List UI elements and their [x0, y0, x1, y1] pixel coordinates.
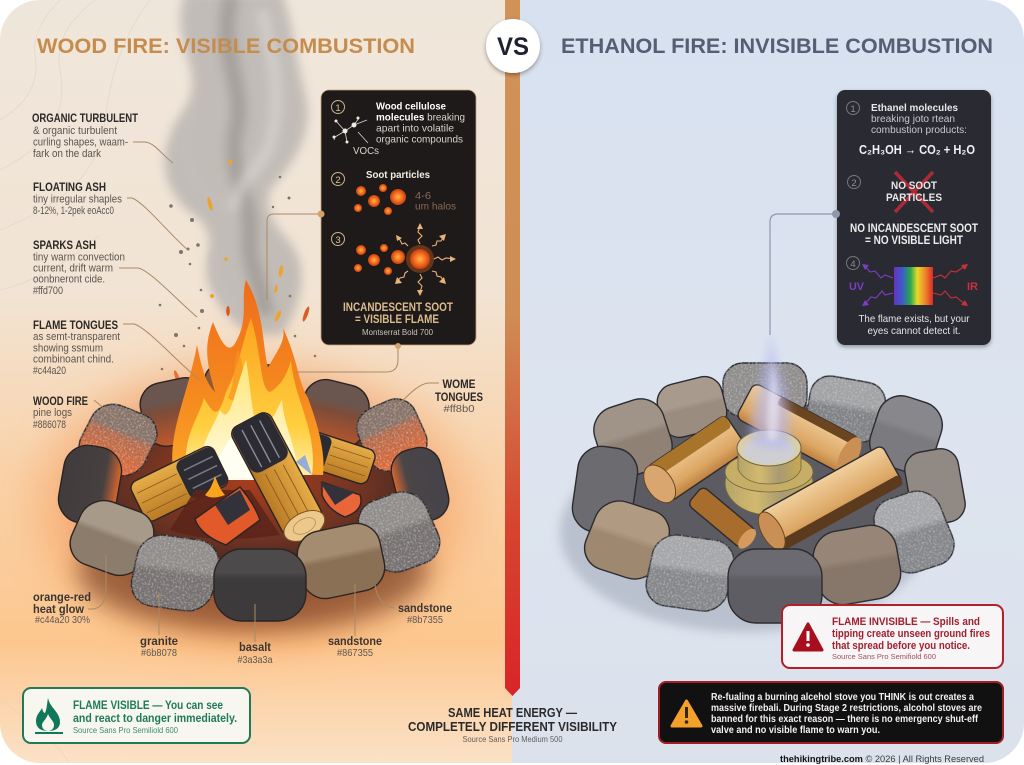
- label: granite: granite: [140, 636, 178, 648]
- label: granite: #6b8078: [141, 648, 177, 659]
- icon: red warning triangle: [794, 624, 822, 650]
- illustration: ash particles: [159, 176, 316, 370]
- illustration: wood fire pit: [7, 280, 497, 670]
- stone: far right: [902, 446, 968, 528]
- callout: refueling warning: valve and no visible flame to warn you.: [711, 725, 880, 736]
- log: center charred log: [229, 410, 330, 548]
- step 2 no soot: PARTICLES: [886, 192, 942, 204]
- label: heat glow: heat glow: [33, 604, 84, 616]
- illustration: smoke column: [165, 0, 308, 335]
- step 3: [332, 223, 456, 296]
- callout: flame visible: Source Sans Pro Semiliold 600: [73, 726, 179, 735]
- step 1: 1: [850, 104, 856, 115]
- label: sandstone right: #8b7355: [407, 615, 443, 626]
- panel: ethanol explanation: [832, 90, 991, 345]
- heading: wood fire: WOOD FIRE: VISIBLE COMBUSTION: [37, 35, 415, 58]
- label: organic turbulent: & organic turbulent: [33, 125, 117, 137]
- label: sparks ash: tiny warm convection: [33, 252, 125, 264]
- label: sparks ash: current, drift warm: [33, 262, 113, 274]
- step 4 spectrum: IR: [967, 281, 978, 293]
- label: organic turbulent: curling shapes, waam-: [33, 136, 128, 148]
- flame exists note: The flame exists, but your: [858, 313, 970, 325]
- embers: right coal: [320, 482, 361, 517]
- step 1: Ethanel molecules: [871, 102, 958, 114]
- callout: flame invisible: FLAME INVISIBLE — Spills and: [832, 616, 980, 628]
- callout: flame visible: and react to danger immediately.: [73, 711, 237, 725]
- stove: alcohol burner: [725, 430, 813, 515]
- label: wome tongues: WOME: [442, 377, 476, 391]
- soot conclusion: Montserrat Bold 700: [362, 328, 434, 337]
- label: wood fire pine logs: WOOD FIRE: [33, 394, 88, 408]
- stone: back center: [205, 365, 285, 411]
- callout: flame invisible: that spread before you notice.: [832, 640, 970, 652]
- stone: back right: [294, 375, 374, 453]
- stone: front sandstone: [577, 495, 677, 585]
- chemical formula: C₂H₃OH → CO₂ + H₂O: [859, 143, 975, 157]
- label: flame tongues: FLAME TONGUES: [33, 318, 118, 332]
- label: granite: [140, 592, 178, 659]
- callout: refueling warning: Re-fualing a burning alcehol stove you THINK is out creates a: [711, 692, 974, 703]
- label: flame tongues: #c44a20: [33, 365, 66, 377]
- connector: soot panel to flame: [267, 214, 398, 372]
- large log: [752, 445, 904, 556]
- step 4 spectrum: UV: [849, 281, 865, 293]
- step 3: 3: [335, 235, 341, 246]
- label: sparks ash: #ffd700: [33, 285, 63, 297]
- stone: front dark: [728, 549, 822, 623]
- step 2: [332, 169, 456, 215]
- no visible light statement: [850, 223, 978, 247]
- step 1: [846, 102, 967, 136]
- step 2: 4-6: [415, 190, 431, 202]
- step 1: VOCs: [353, 145, 379, 157]
- label: floating ash: FLOATING ASH: [33, 180, 106, 194]
- step 2 no soot: 2: [851, 178, 857, 189]
- step 2 no soot: [848, 172, 942, 212]
- illustration: flames: [172, 280, 324, 480]
- callout: flame visible: [23, 688, 250, 743]
- panel: wood fire background: [0, 0, 513, 765]
- stone: front granite right: [867, 485, 961, 579]
- callout: refueling warning: [659, 682, 1003, 743]
- footer credit: thehikingtribe.com © 2026 | All Rights Reserved: [780, 754, 984, 765]
- label: flame tongues: combinoant chind.: [33, 354, 114, 366]
- label: organic turbulent: fark on the dark: [33, 148, 101, 160]
- step 2 no soot: NO SOOT: [891, 180, 937, 192]
- stone: top left: [653, 373, 731, 441]
- label: sandstone center: #867355: [337, 648, 373, 659]
- step 1: 1: [335, 103, 341, 114]
- left log: [637, 414, 749, 509]
- step 2: Soot particles: [366, 169, 430, 181]
- step 1: combustion products:: [871, 124, 967, 136]
- label: heat glow: #c44a20 30%: [35, 615, 90, 626]
- stone: front granite: [127, 532, 223, 614]
- stone: left dark: [569, 443, 641, 537]
- label: sandstone center: sandstone: [328, 636, 382, 648]
- stone: right: [863, 390, 949, 478]
- invisible flame haze: [751, 330, 790, 450]
- stone: back left: [136, 374, 216, 450]
- label: wood fire pine logs: pine logs: [33, 407, 72, 419]
- illustration: ethanol fire pit: [560, 330, 968, 632]
- label: wome tongues: TONGUES: [435, 390, 483, 404]
- stone: far left hot: [71, 398, 165, 482]
- center caption: Source Sans Pro Medium 500: [462, 735, 563, 744]
- step 1: apart into volatile: [376, 122, 454, 134]
- back log right: [299, 430, 377, 486]
- no visible light statement: NO INCANDESCENT SOOT: [850, 223, 978, 235]
- label: wood fire pine logs: [33, 394, 118, 431]
- embers: front coal: [170, 476, 280, 545]
- step 1: Wood cellulose: [376, 100, 446, 112]
- stone: top: [723, 363, 807, 417]
- label: floating ash: 8-12%, 1-2pek eoAcc0: [33, 205, 114, 217]
- step 2: 2: [335, 175, 341, 186]
- stone: top right: [803, 373, 889, 445]
- callout: flame invisible: Source Sans Pro Semifiold 600: [832, 652, 936, 661]
- label: heat glow: [33, 555, 106, 626]
- label: sparks ash: [33, 238, 197, 317]
- label: wood fire pine logs: #886078: [33, 419, 66, 431]
- flame exists note: eyes cannot detect it.: [868, 325, 960, 337]
- stone: front granite: [642, 532, 738, 614]
- stone: left dark: [55, 442, 125, 528]
- label: flame tongues: as semt-transparent: [33, 331, 120, 343]
- stone: right dark: [387, 443, 453, 527]
- step 1: organic compounds: [376, 134, 463, 146]
- stone: front sandstone: [293, 519, 389, 603]
- label: flame tongues: [33, 318, 200, 380]
- center caption: [408, 706, 618, 744]
- callout: flame invisible: tipping create unseen ground fires: [832, 628, 990, 640]
- label: basalt: [238, 604, 273, 666]
- step 4 spectrum: 4: [850, 259, 856, 270]
- soot conclusion: INCANDESCENT SOOT: [343, 300, 454, 314]
- label: wome tongues: [392, 377, 483, 415]
- callout: flame invisible: [782, 605, 1003, 668]
- stone: front granite right: [351, 485, 447, 579]
- label: floating ash: tiny irregular shaples: [33, 194, 122, 206]
- callout: refueling warning: banned for this exact reason — there is no emergency shut-eff: [711, 714, 979, 725]
- step 1: molecules breaking: [376, 112, 465, 124]
- label: heat glow: orange-red: [33, 592, 91, 604]
- panel: ethanol fire background: [512, 0, 1024, 765]
- soot conclusion: = VISIBLE FLAME: [355, 312, 439, 326]
- label: organic turbulent: ORGANIC TURBULENT: [32, 111, 139, 125]
- label: sandstone right: [375, 585, 452, 626]
- connector: ethanol panel to stove: [770, 214, 836, 335]
- stone: left: [588, 393, 678, 483]
- callout: refueling warning: massive firebali. During Stage 2 restrictions, alcohol stoves are: [711, 703, 982, 714]
- no visible light statement: = NO VISIBLE LIGHT: [865, 235, 963, 247]
- label: wome tongues: #ff8b0: [444, 404, 475, 415]
- label: flame tongues: showing ssmum: [33, 342, 103, 354]
- panel: incandescent soot explanation: [318, 90, 476, 349]
- stone: front beige: [809, 521, 905, 609]
- label: sparks ash: SPARKS ASH: [33, 238, 96, 252]
- label: organic turbulent: [32, 111, 173, 163]
- icon: green flame: [35, 698, 63, 734]
- step 4 spectrum: [846, 256, 978, 306]
- flame exists note: [858, 313, 970, 337]
- label: basalt: basalt: [239, 642, 271, 654]
- stone: far right hot: [350, 392, 434, 478]
- heading: ethanol fire: ETHANOL FIRE: INVISIBLE COMBUSTION: [561, 35, 993, 58]
- label: floating ash: [33, 180, 188, 250]
- log: charred left log: [128, 444, 230, 524]
- icon: orange warning triangle: [672, 701, 701, 726]
- step 1: breaking joto rtean: [871, 113, 955, 125]
- VS badge: [486, 19, 540, 73]
- step 1: [332, 100, 465, 157]
- label: sandstone right: sandstone: [398, 603, 452, 615]
- soot conclusion: [343, 300, 454, 337]
- callout: flame visible: FLAME VISIBLE — You can see: [73, 698, 223, 712]
- center divider bar: [505, 0, 520, 696]
- center caption: SAME HEAT ENERGY —: [448, 706, 577, 720]
- label: sandstone center: [328, 584, 382, 659]
- stone: front sandstone left: [62, 494, 162, 582]
- VS badge: VS: [497, 33, 529, 61]
- step 2: um halos: [415, 200, 456, 212]
- label: basalt: #3a3a3a: [238, 655, 273, 666]
- illustration: sparks: [173, 160, 311, 384]
- back log: [736, 382, 867, 477]
- small log: [687, 486, 759, 552]
- label: sparks ash: oonbneront cide.: [33, 274, 105, 286]
- stone: front basalt: [214, 549, 306, 621]
- center caption: COMPLETELY DIFFERENT VISIBILITY: [408, 720, 618, 734]
